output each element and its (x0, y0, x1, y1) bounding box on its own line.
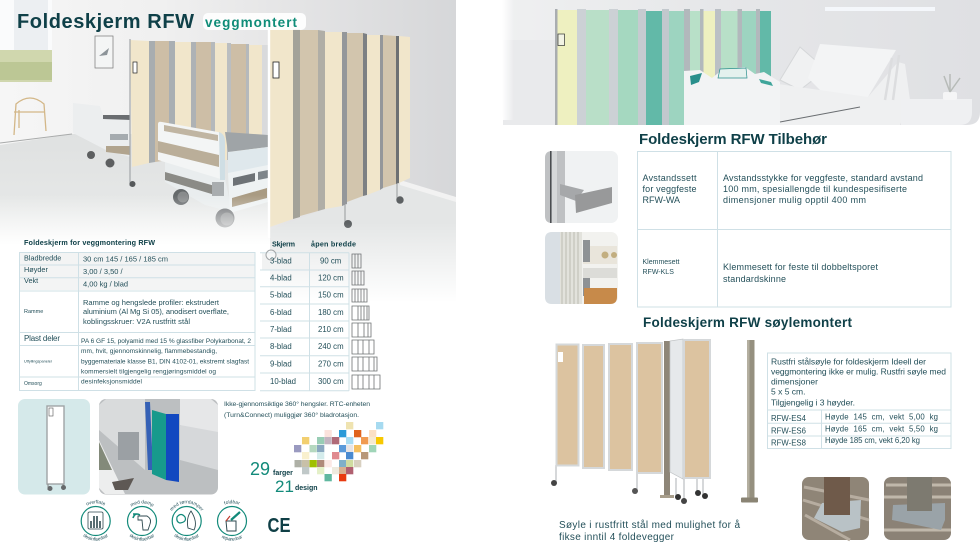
row labels: Utfyllingspaneler (24, 360, 53, 364)
row values: PA 6 GF 15, polyamid med 15 % glassfiber Polykarbonat, 2 (81, 338, 251, 345)
colour and design counts: design (295, 485, 318, 492)
row labels: Høyder (24, 265, 48, 274)
colour and design counts: 29 (250, 459, 270, 479)
row values (81, 254, 251, 386)
row labels: Bladbredde (24, 254, 61, 262)
CE mark: CE (268, 514, 290, 537)
table rows: 240 cm (318, 342, 344, 351)
icon: repairable: reparerbar (222, 535, 242, 541)
post description: dimensjoner (771, 376, 818, 386)
table rows: 10-blad (270, 377, 296, 386)
icon: steam disinfectable: desinfiserbar (130, 534, 154, 541)
photo: clamp set (545, 232, 618, 304)
icon: dry steam disinfectable (170, 500, 204, 541)
panel: accessories table (638, 152, 951, 307)
row values: 3,00 / 3,50 / (83, 267, 124, 276)
row values: 30 cm 145 / 165 / 185 cm (83, 254, 168, 264)
spec table heading: Foldeskjerm for veggmontering RFW (24, 238, 155, 247)
icon: dry steam disinfectable: desinfiserbar (174, 534, 199, 541)
table rows: 300 cm (318, 377, 344, 386)
post variants (771, 412, 938, 448)
colour and design counts (250, 459, 318, 496)
icon: surface disinfectable: overflate (86, 500, 106, 506)
row values: koblingsskruer: V2A rustfritt stål (83, 317, 190, 326)
second row: standardskinne (723, 274, 786, 284)
illustration: screen on stainless post (551, 339, 710, 504)
panel: specification table (20, 252, 255, 390)
post variants: RFW-ES4 (771, 414, 807, 423)
post variants: RFW-ES6 (771, 426, 806, 436)
colour and design counts: 21 (275, 477, 294, 496)
icon: repairable (216, 500, 248, 541)
fades to white (0, 195, 456, 315)
first row: Avstandsstykke for veggfeste, standard avstand (723, 173, 923, 183)
table rows: 180 cm (318, 308, 344, 317)
title: Foldeskjerm RFW (17, 11, 194, 33)
first row: 100 mm, spesiallengde til kundespesifiserte (723, 184, 907, 194)
lens detail on first row (266, 250, 276, 260)
front folding screen (269, 28, 410, 238)
table rows: 4-blad (270, 274, 292, 282)
second row: RFW-KLS (642, 269, 674, 276)
icon: repairable: foldbar (224, 500, 240, 505)
table headers: Skjerm (272, 240, 295, 248)
post description: Rustfri stålsøyle for foldeskjerm Ideell der (771, 356, 926, 366)
photo: spacer bracket (545, 151, 618, 223)
icon: steam disinfectable (126, 500, 158, 541)
screen diagrams (352, 254, 380, 389)
wooden chair (14, 98, 46, 135)
table rows: 150 cm (318, 290, 344, 300)
table rows: 210 cm (318, 325, 344, 334)
single-panel product image (18, 399, 90, 494)
illustration: standalone post (741, 340, 758, 502)
post description (771, 356, 946, 408)
colour swatch mosaic (294, 422, 383, 481)
photo: post base bracket (802, 477, 869, 540)
table rows: 5-blad (270, 290, 292, 300)
row values: kommersielt tilgjengelig rengjøringsmiddel og (81, 368, 216, 376)
title: veggmontert (205, 15, 298, 30)
room photo with blue and teal screen (99, 399, 218, 494)
table rows: 8-blad (270, 342, 292, 351)
table rows: 3-blad (270, 256, 292, 266)
caption: Søyle i rustfritt stål med mulighet for å (559, 519, 740, 531)
second row: Klemmesett for feste til dobbeltsporet (723, 262, 878, 272)
table rows: 9-blad (270, 360, 292, 368)
post description: Tilgjengelig i 3 høyder. (771, 398, 855, 408)
row values: mm, hvit, gjennomskinnelig, flammebestandig, (81, 348, 217, 355)
table rows: 270 cm (318, 360, 344, 368)
row labels (24, 254, 61, 387)
panel: tinted room banner (502, 0, 980, 125)
first row: for veggfeste (642, 184, 696, 194)
icon: surface disinfectable (80, 500, 111, 541)
post variants: RFW-ES8 (771, 438, 806, 448)
first row: RFW-WA (642, 195, 680, 205)
table rows: 120 cm (318, 274, 344, 282)
wall picture (95, 36, 113, 68)
icon: surface disinfectable: desinfiserbar (84, 534, 108, 541)
hinge description (224, 400, 370, 419)
row labels: Plast deler (24, 334, 60, 343)
hinge description: Ikke-gjennomsiktige 360° hengsler. RTC-enheten (224, 400, 370, 408)
row labels: Ramme (24, 309, 43, 315)
colour and design counts: farger (273, 470, 293, 477)
row labels: Vekt (24, 276, 38, 285)
heading: post mounted: Foldeskjerm RFW søylemontert (643, 315, 852, 330)
icon: dry steam disinfectable: med tørrdamper (170, 500, 204, 511)
row labels: Omsorg (24, 381, 42, 387)
post description: veggmontering ikke er mulig. Rustfri søyle med (771, 366, 946, 376)
caption (559, 519, 740, 543)
hinge description: (Turn&Connect) muliggjør 360° bladrotasjon. (224, 411, 359, 419)
first row (642, 173, 923, 205)
rear folding screen (130, 39, 270, 187)
row values: 4,00 kg / blad (83, 280, 128, 288)
table rows: 6-blad (270, 308, 292, 317)
white hospital bed (684, 44, 910, 125)
post variants: Høyde 165 cm, vekt 5,50 kg (825, 424, 938, 434)
second row: Klemmesett (642, 259, 680, 266)
table rows: 90 cm (320, 256, 341, 266)
table rows: 7-blad (270, 325, 292, 334)
post variants: Høyde 145 cm, vekt 5,00 kg (825, 412, 938, 422)
first row: dimensjoner mulig opptil 400 mm (723, 195, 866, 205)
row values: aluminium (Al Mg Si 05), anodisert overflate, (83, 307, 229, 316)
side table with plant (901, 74, 972, 125)
second row (642, 259, 878, 284)
table headers (272, 240, 356, 248)
rear bed (73, 103, 130, 168)
panel: room photo with wall-mounted screens (0, 0, 456, 315)
front bed (158, 122, 268, 228)
icon: steam disinfectable: med damp (130, 500, 154, 507)
photo: post base cover (884, 477, 951, 540)
heading: accessories: Foldeskjerm RFW Tilbehør (639, 131, 827, 148)
first row: Avstandssett (642, 173, 697, 183)
caption: fikse inntil 4 foldevegger (559, 532, 675, 543)
panel: post spec table (768, 353, 951, 448)
panel: width table (260, 240, 380, 391)
coloured folding screen (555, 9, 771, 125)
row values: Ramme og hengslede profiler: ekstrudert (83, 298, 220, 307)
row values: byggemateriale klasse B1, DIN 4102-01, ekstremt slagfast (81, 358, 249, 366)
table rows (270, 256, 344, 386)
window with city and greenery (0, 0, 52, 82)
row values: desinfeksjonsmiddel (81, 378, 143, 386)
title (17, 11, 306, 33)
post description: 5 x 5 cm. (771, 386, 805, 396)
post variants: Høyde 185 cm, vekt 6,20 kg (825, 436, 920, 445)
table headers: åpen bredde (311, 240, 356, 248)
